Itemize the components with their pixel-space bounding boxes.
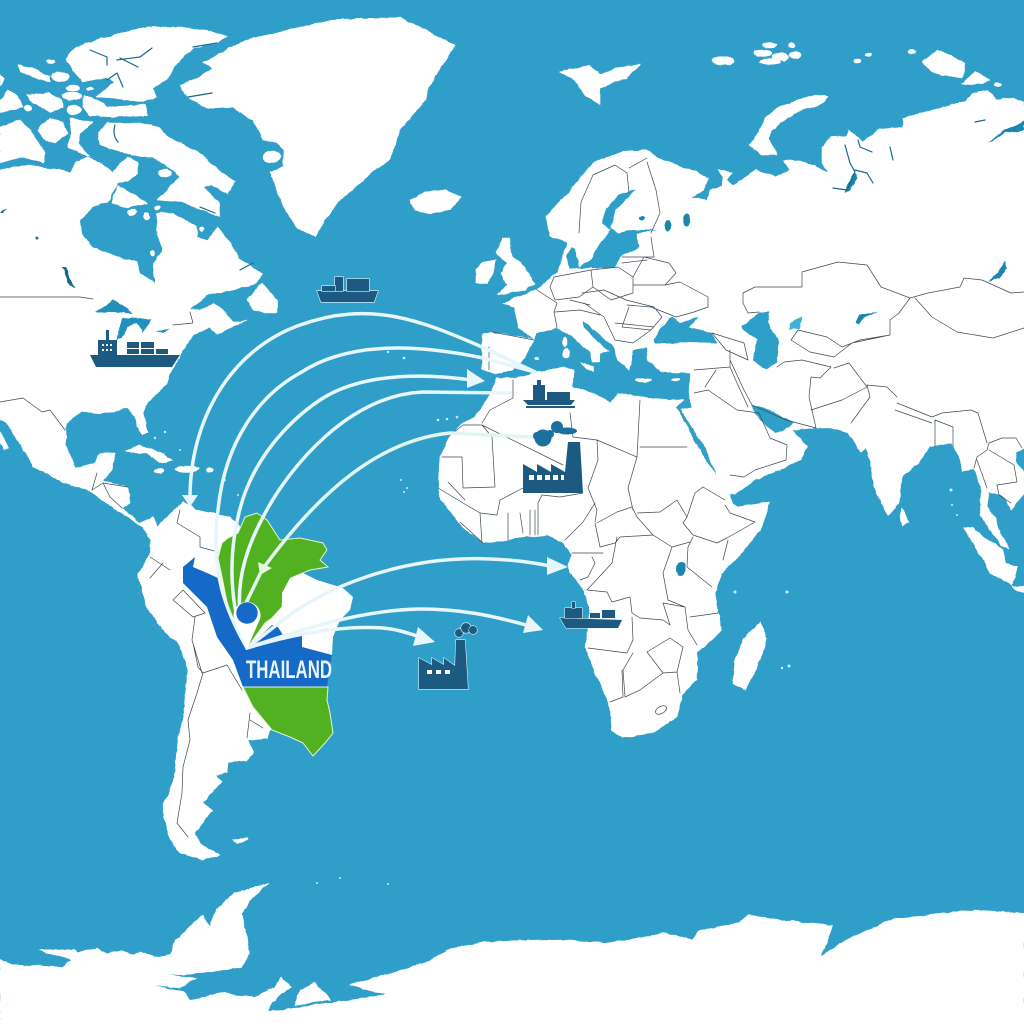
landmass: Caribbean islands — [125, 445, 214, 474]
arrow: route to ocean factory — [247, 627, 435, 648]
borders: Europe — [489, 158, 708, 370]
border: Lesotho — [654, 704, 668, 716]
borders: Africa — [438, 380, 755, 702]
water: Baltic Sea — [566, 189, 658, 268]
water: Gulf of Ob and Siberian inlets — [845, 121, 1024, 192]
landmass: Franz Josef Land — [712, 42, 801, 65]
water: Lake Victoria — [676, 562, 686, 576]
landmass: Africa — [438, 367, 770, 737]
borders: Asia — [694, 262, 1024, 503]
arrow: route to Gibraltar — [232, 369, 485, 648]
landmass: Ireland — [476, 260, 496, 283]
water: Persian Gulf — [752, 405, 793, 433]
water: Caspian Sea — [741, 312, 779, 370]
water: Black Sea — [653, 317, 717, 343]
landmass: Greenland — [180, 18, 455, 237]
landmass: Mediterranean islands — [535, 338, 680, 382]
landmass: Baja California — [0, 432, 8, 450]
landmass: Madagascar — [733, 622, 767, 690]
landmass: Great Britain — [496, 238, 534, 295]
landmass: Antarctica — [0, 883, 1024, 1024]
arrow: route to Morocco — [239, 392, 510, 648]
trade route arrows — [182, 314, 568, 648]
inland water — [0, 121, 1024, 576]
icon: factory with smoke, Atlantic — [419, 623, 477, 689]
landmass: Svalbard — [560, 65, 640, 105]
icon: cargo ship, north Atlantic — [317, 277, 378, 302]
icon: cargo ship, North Africa — [523, 380, 575, 408]
borders: North America — [0, 297, 193, 508]
Thailand: blue band — [183, 557, 332, 687]
dark channels and coast details — [90, 43, 985, 270]
water: Aral Sea — [789, 317, 802, 330]
arrow: route to Iberia — [216, 348, 535, 648]
landmass: Severnaya Zemlya — [853, 50, 1002, 87]
Thailand: lower green region — [243, 687, 333, 756]
water: Great Lakes — [95, 300, 170, 340]
arrow: route to Gulf of Guinea — [247, 557, 568, 648]
landmass: Weddell Sea island — [294, 982, 330, 1005]
landmass: Disko Island — [263, 152, 281, 162]
icon: cargo ship, Angola coast — [560, 602, 622, 628]
icon: factory with smoke, West Africa — [523, 421, 583, 493]
arrow: route to the Caribbean coast — [182, 314, 535, 507]
landmass: South America — [138, 502, 300, 860]
arrow: route to southern Atlantic ship — [247, 609, 543, 648]
Thailand: white cloud-like land — [272, 573, 353, 655]
landmass: Iceland — [410, 190, 462, 214]
small ocean islands — [154, 351, 958, 885]
landmass: Novaya Zemlya — [749, 95, 828, 155]
landmass: North America — [0, 157, 262, 532]
highlighted Thailand shape — [183, 513, 353, 756]
Thailand: country label: THAILAND — [246, 656, 332, 684]
arrow: route from West Africa — [245, 433, 533, 605]
landmass: Canadian Arctic islands — [0, 27, 235, 256]
water: Lake Baikal — [987, 260, 1007, 282]
borders: South America — [150, 510, 263, 837]
Thailand: upper green region — [218, 513, 328, 648]
landmass: Newfoundland — [247, 283, 277, 313]
landmass: Eurasia — [482, 90, 1024, 548]
water: Ladoga and Onega lakes — [639, 214, 690, 232]
icon: cargo ship, North America — [90, 330, 180, 367]
landmass: Java — [1012, 586, 1024, 593]
country borders — [0, 158, 1024, 837]
location pin — [234, 602, 260, 649]
water: northern Canadian lakes — [0, 208, 75, 288]
landmass: Sri Lanka — [900, 508, 909, 526]
landmass: Sumatra — [964, 527, 1017, 585]
water: Lake Balkhash — [856, 312, 878, 324]
landmass: Falkland Islands — [233, 837, 248, 843]
